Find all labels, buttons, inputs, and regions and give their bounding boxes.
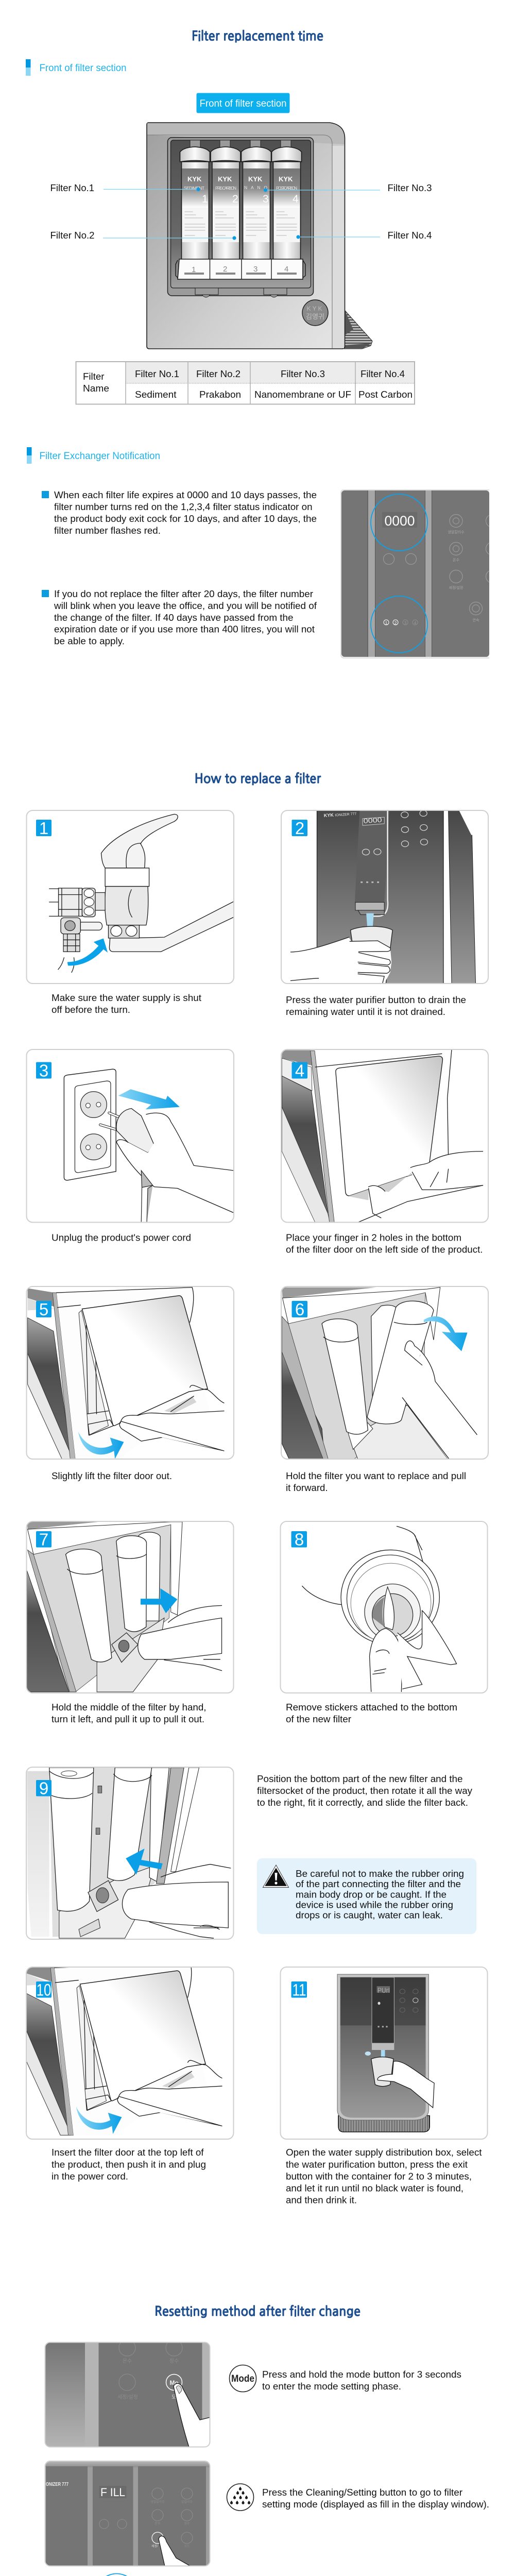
text block: step 9 instructions — [257, 1773, 473, 1808]
icon: mode button — [230, 2365, 256, 2392]
logo badge — [302, 300, 328, 326]
control panel image: 모드 — [184, 2545, 190, 2548]
caption: turn it left, and pull it up to pull it out. — [52, 1714, 204, 1724]
caption: in the power cord. — [52, 2171, 128, 2181]
caption: Slightly lift the filter door out. — [52, 1470, 172, 1481]
section heading: filter exchanger notification: Filter Exchanger Notification — [39, 451, 160, 462]
filter cartridges: 3 — [263, 193, 269, 205]
card frame — [280, 1521, 487, 1693]
warning text: device is used while the rubber oring — [296, 1899, 453, 1910]
card frame — [26, 1967, 234, 2139]
caption: the water purification button, press the exit — [286, 2159, 468, 2170]
filter compartment — [168, 138, 313, 296]
badge: 2: 2 — [295, 819, 304, 838]
table: filter names: Sediment — [135, 389, 176, 400]
display: 0000: 0000 — [384, 513, 415, 529]
badge: 9: 9 — [39, 1778, 48, 1798]
text block: step 9 instructions: to the right, fit it correctly, and slide the filter back. — [257, 1797, 468, 1808]
caption — [286, 1232, 483, 1255]
caption: Open the water supply distribution box, select — [286, 2147, 482, 2158]
highlight circles — [94, 2574, 138, 2576]
control panel image: 세정/ — [151, 2544, 158, 2548]
text block: step 9 instructions: filtersocket of the product, then rotate it all the way — [257, 1785, 473, 1796]
compartment tabs — [195, 288, 287, 297]
panel: mode button press — [45, 2340, 210, 2447]
table: filter names: Filter No.3 — [281, 368, 325, 379]
badge: 4: 4 — [295, 1061, 304, 1080]
control panel image: 알칼리수 — [181, 2500, 193, 2504]
caption — [52, 1702, 206, 1724]
filter cartridges: SEDIMENT — [184, 185, 204, 191]
label: Filter No.4: Filter No.4 — [387, 230, 432, 241]
text block: filter expiry notice: When each filter life expires at 0000 and 10 days passes, the — [54, 489, 317, 500]
illustration: filter door finger holes — [282, 1049, 483, 1224]
button label: front of filter section: Front of filter section — [200, 98, 286, 109]
panel: step 1 — [27, 810, 234, 1015]
section heading: front of filter section: Front of filter section — [39, 63, 127, 74]
table: filter names: Filter No.2 — [196, 368, 241, 379]
card frame — [26, 1767, 234, 1939]
filter cartridges — [176, 147, 305, 279]
filter cartridges: KYK — [248, 175, 263, 183]
table: filter names: Name — [83, 383, 109, 394]
card frame — [27, 1286, 234, 1459]
panel icon labels — [448, 530, 479, 622]
drip tray — [344, 311, 372, 349]
icon: cleaning/setting drops — [227, 2484, 253, 2511]
text: mode instructions: Press and hold the mode button for 3 seconds — [262, 2369, 461, 2380]
section heading: filter exchanger notification — [27, 447, 160, 464]
text block: filter expiry notice: filter number turns red on the 1,2,3,4 filter status indicator on — [54, 501, 312, 512]
filter cartridges: 1 — [202, 193, 208, 205]
caption: Hold the middle of the filter by hand, — [52, 1702, 206, 1713]
control panel image: 냉알칼리수 — [150, 2500, 165, 2504]
caption — [286, 1702, 457, 1724]
caption: Make sure the water supply is shut — [52, 992, 201, 1003]
badge: 2 — [291, 819, 307, 838]
caption: Remove stickers attached to the bottom — [286, 1702, 457, 1713]
text block: replacement lockout notice: If you do not replace the filter after 20 days, the filter number — [54, 588, 313, 599]
text block: replacement lockout notice: will blink when you leave the office, and you will be notified of — [54, 600, 317, 611]
machine display: PUrI: PUrI — [377, 1986, 390, 1994]
label: Filter No.3: Filter No.3 — [387, 182, 432, 193]
table: filter names: Filter No.4 — [360, 368, 405, 379]
filter cartridges: POST-CARBON — [276, 185, 297, 191]
filter cartridges: 3 — [253, 265, 258, 274]
caption — [286, 2147, 482, 2205]
table: filter names: Post Carbon — [358, 389, 413, 400]
status indicators: 3 — [404, 621, 407, 625]
badge: 6 — [291, 1300, 307, 1319]
title: Resetting method after filter change: Resetting method after filter change — [154, 2305, 360, 2318]
control panel image: 세정/설정 — [117, 2394, 138, 2400]
badge: 6: 6 — [295, 1300, 304, 1319]
logo badge: KYK — [306, 305, 324, 312]
badge: 4 — [291, 1061, 307, 1080]
caption: button with the container for 2 to 3 minutes, — [286, 2171, 472, 2181]
control panel image — [45, 2461, 210, 2566]
control panel image: 모 — [171, 2395, 176, 2400]
illustration: pull filter forward — [282, 1287, 477, 1461]
control panel image: ONIZER 777 — [46, 2482, 68, 2487]
caption — [286, 1470, 466, 1493]
filter cartridges: NANO — [244, 185, 267, 190]
callout: rubber o-ring warning — [257, 1858, 476, 1934]
illustration: faucet valve — [49, 814, 234, 972]
text block: filter expiry notice — [42, 489, 317, 536]
text block: filter expiry notice: the product body exit cock for 10 days, and after 10 days, the — [54, 513, 317, 524]
badge: 5: 5 — [39, 1300, 48, 1319]
badge: 8: 8 — [295, 1530, 304, 1549]
badge: 3: 3 — [39, 1061, 48, 1080]
caption: Hold the filter you want to replace and pull — [286, 1470, 466, 1481]
filter cartridges: KYK — [187, 175, 202, 183]
text: cleaning/setting instructions: setting mode (displayed as fill in the display window). — [262, 2499, 489, 2510]
icon: warning triangle — [263, 1865, 288, 1888]
panel: step 11 — [280, 1967, 487, 2205]
text: cleaning/setting instructions: Press the Cleaning/Setting button to go to filter — [262, 2487, 462, 2498]
device: front of filter section with four filters — [147, 123, 372, 349]
panel: step 8 — [280, 1521, 487, 1724]
filter cartridges: 2 — [232, 193, 238, 205]
illustration: unplug cord — [64, 1069, 234, 1222]
caption: Unplug the product's power cord — [52, 1232, 191, 1243]
text: mode instructions: to enter the mode setting phase. — [262, 2381, 401, 2392]
title: Filter replacement time: Filter replacement time — [192, 30, 323, 42]
caption: off before the turn. — [52, 1004, 130, 1015]
panel: control panel status indicators — [341, 490, 499, 657]
text block: replacement lockout notice: be able to apply. — [54, 636, 125, 646]
caption: the product, then push it in and plug — [52, 2159, 206, 2170]
illustration: seat new filter — [27, 1768, 231, 1938]
button label: front of filter section — [197, 93, 289, 113]
illustration: twist filter out — [27, 1522, 222, 1692]
table: filter names: Nanomembrane or UF — [254, 389, 351, 400]
panel: step 5 — [27, 1286, 234, 1481]
panel icon labels: 냉알칼리수 — [448, 530, 465, 534]
control panel image: F ILL — [100, 2486, 125, 2499]
panel: step 7 — [27, 1521, 234, 1724]
section heading: front of filter section — [26, 59, 127, 76]
card frame — [27, 1521, 234, 1693]
panel icon labels: 연속 — [473, 618, 479, 622]
text block: replacement lockout notice: the change of the filter. If 40 days have passed from the — [54, 612, 294, 623]
table: filter names — [76, 362, 415, 404]
caption: Press the water purifier button to drain the — [286, 994, 466, 1005]
text: cleaning/setting instructions — [262, 2487, 489, 2510]
panel: filter status check — [45, 2574, 210, 2576]
text: mode instructions — [262, 2369, 461, 2392]
filter cartridges: 4 — [284, 265, 288, 274]
label: Filter No.2: Filter No.2 — [50, 230, 95, 241]
panel: step 9 — [26, 1767, 234, 1939]
filter cartridges: KYK — [279, 175, 293, 183]
panel frame — [341, 490, 489, 658]
card frame — [27, 1049, 234, 1222]
caption — [52, 992, 201, 1015]
panel: step 4 — [281, 1049, 488, 1255]
filter cartridges: PRE-CARBON — [215, 185, 236, 191]
filter cartridges: 1 — [192, 265, 196, 274]
status indicators: 1 — [385, 621, 388, 625]
card frame — [281, 1286, 488, 1459]
control panel image: 정수 — [184, 2522, 190, 2526]
title: How to replace a filter: How to replace a filter — [195, 772, 321, 785]
warning text: Be careful not to make the rubber oring — [296, 1868, 464, 1879]
text block: replacement lockout notice — [42, 588, 317, 646]
panel frame — [45, 2342, 210, 2447]
filter cartridges: 4 — [293, 193, 299, 205]
badge: 7 — [36, 1530, 52, 1549]
status indicators — [384, 620, 418, 625]
display reading: 0000 — [363, 816, 382, 825]
caption — [52, 2147, 206, 2181]
illustration: lift filter door — [28, 1287, 224, 1460]
filter cartridges: KYK — [218, 175, 232, 183]
badge: 5 — [36, 1300, 52, 1319]
panel: step 2 — [281, 810, 488, 1017]
warning text: drops or is caught, water can leak. — [296, 1909, 443, 1921]
badge: 1: 1 — [39, 819, 48, 838]
status indicators: 4 — [414, 621, 417, 625]
panel icon labels: 세정/설정 — [449, 585, 463, 590]
control panel image: 정수 — [169, 2358, 179, 2364]
text block: filter expiry notice: filter number flashes red. — [54, 525, 161, 536]
panel: step 3 — [27, 1049, 234, 1243]
badge: 9 — [36, 1778, 52, 1798]
control panel image: 온수 — [154, 2522, 161, 2526]
card frame — [281, 1049, 488, 1222]
caption: Insert the filter door at the top left of — [52, 2147, 204, 2158]
text block: step 9 instructions: Position the bottom part of the new filter and the — [257, 1773, 462, 1784]
illustration: run water until clear — [337, 1974, 434, 2132]
caption: remaining water until it is not drained. — [286, 1006, 445, 1017]
control panel image: 온수 — [123, 2358, 132, 2364]
illustration: draining water into cup — [289, 810, 476, 984]
warning text — [296, 1868, 464, 1921]
badge: 8 — [291, 1530, 307, 1549]
icon: mode button: Mode — [231, 2374, 254, 2384]
illustration: remove sticker — [302, 1527, 457, 1692]
panel: step 6 — [281, 1286, 488, 1493]
text block: replacement lockout notice: expiration date or if you use more than 400 litres, you will not — [54, 623, 315, 635]
caption: Place your finger in 2 holes in the bottom — [286, 1232, 461, 1243]
caption — [286, 994, 466, 1017]
card frame — [27, 810, 234, 984]
warning text: of the part connecting the filter and the — [296, 1878, 461, 1889]
panel: step 10 — [26, 1962, 234, 2181]
status indicators: 2 — [394, 621, 397, 625]
badge: 11: 11 — [293, 1980, 306, 1999]
caption: it forward. — [286, 1482, 328, 1493]
panel icon labels: 온수 — [453, 558, 459, 562]
caption: of the new filter — [286, 1714, 351, 1724]
panel: cleaning/setting button press — [45, 2461, 210, 2566]
warning text: main body drop or be caught. If the — [296, 1889, 447, 1900]
control panel image — [45, 2340, 210, 2447]
body housing — [147, 123, 345, 349]
table: filter names: Prakabon — [199, 389, 241, 400]
filter cartridges: 2 — [223, 265, 227, 274]
panel frame — [45, 2461, 210, 2566]
control panel image: Mo — [169, 2379, 179, 2386]
card frame — [281, 810, 488, 984]
caption: and then drink it. — [286, 2195, 357, 2205]
badge: 7: 7 — [39, 1530, 48, 1549]
illustration: close filter door — [26, 1962, 222, 2135]
caption: and let it run until no black water is found, — [286, 2182, 464, 2194]
badge: 10: 10 — [36, 1980, 52, 1999]
caption: of the filter door on the left side of the product. — [286, 1244, 483, 1255]
highlight circles — [371, 494, 427, 653]
machine label: KYK IONIZER 777 — [323, 811, 357, 818]
callout leaders: filter positions — [103, 188, 380, 240]
badge: 1 — [36, 819, 52, 838]
card frame — [280, 1967, 487, 2139]
label: Filter No.1: Filter No.1 — [50, 182, 94, 193]
table: filter names: Filter — [83, 371, 104, 382]
logo badge: 김영귀 — [306, 313, 324, 320]
badge: 3 — [36, 1061, 52, 1080]
table: filter names: Filter No.1 — [135, 368, 179, 379]
panel icons — [383, 514, 499, 615]
